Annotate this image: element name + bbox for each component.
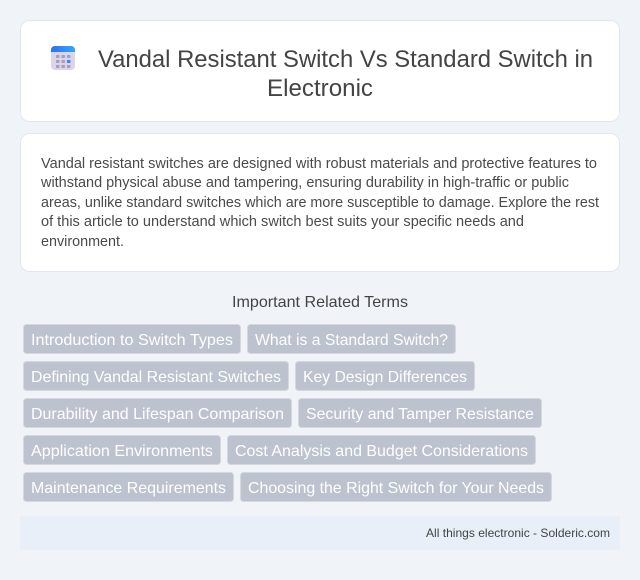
tag: Security and Tamper Resistance xyxy=(298,398,542,428)
intro paragraph xyxy=(40,156,599,250)
tag: Durability and Lifespan Comparison xyxy=(24,398,292,428)
header panel xyxy=(20,20,620,122)
tag: Security and Tamper Resistance: Security and Tamper Resistance xyxy=(306,406,534,423)
intro paragraph: areas, unlike standard switches which are more susceptible to damage. Explore the rest xyxy=(41,195,599,211)
tag: Application Environments: Application Environments xyxy=(31,443,213,460)
tag: Key Design Differences: Key Design Differences xyxy=(303,369,467,386)
tag: Application Environments xyxy=(24,436,220,464)
intro paragraph: environment. xyxy=(41,234,124,250)
tag: Introduction to Switch Types xyxy=(24,324,240,354)
intro paragraph: of this article to understand which switch best suits your specific needs and xyxy=(41,214,524,230)
tag: Defining Vandal Resistant Switches xyxy=(24,362,288,390)
tag: What is a Standard Switch? xyxy=(248,324,456,354)
tag: Introduction to Switch Types: Introduction to Switch Types xyxy=(31,332,233,349)
intro paragraph: Vandal resistant switches are designed with robust materials and protective features to xyxy=(41,156,597,172)
tag: Durability and Lifespan Comparison: Durability and Lifespan Comparison xyxy=(31,406,284,423)
related terms tags xyxy=(24,324,552,502)
intro paragraph: withstand physical abuse and tampering, ensuring durability in high-traffic or public xyxy=(40,175,569,191)
tag: Cost Analysis and Budget Considerations xyxy=(228,436,536,464)
tag: Key Design Differences xyxy=(296,362,474,390)
icon: calendar grid xyxy=(51,46,75,70)
tag: Choosing the Right Switch for Your Needs: Choosing the Right Switch for Your Needs xyxy=(248,480,544,497)
tag: Defining Vandal Resistant Switches: Defining Vandal Resistant Switches xyxy=(31,369,281,386)
tag: Cost Analysis and Budget Considerations: Cost Analysis and Budget Considerations xyxy=(235,443,528,460)
footer bar xyxy=(20,516,620,550)
footer credit: All things electronic - Solderic.com xyxy=(426,526,610,540)
title: Electronic xyxy=(267,75,373,102)
intro text panel xyxy=(20,134,620,272)
title xyxy=(98,46,593,102)
tag: Maintenance Requirements: Maintenance Requirements xyxy=(31,480,226,497)
title: Vandal Resistant Switch Vs Standard Switch in xyxy=(98,46,593,73)
related terms heading: Important Related Terms xyxy=(232,294,408,311)
tag: Maintenance Requirements xyxy=(24,472,234,502)
tag: What is a Standard Switch?: What is a Standard Switch? xyxy=(255,332,448,349)
tag: Choosing the Right Switch for Your Needs xyxy=(240,472,552,502)
